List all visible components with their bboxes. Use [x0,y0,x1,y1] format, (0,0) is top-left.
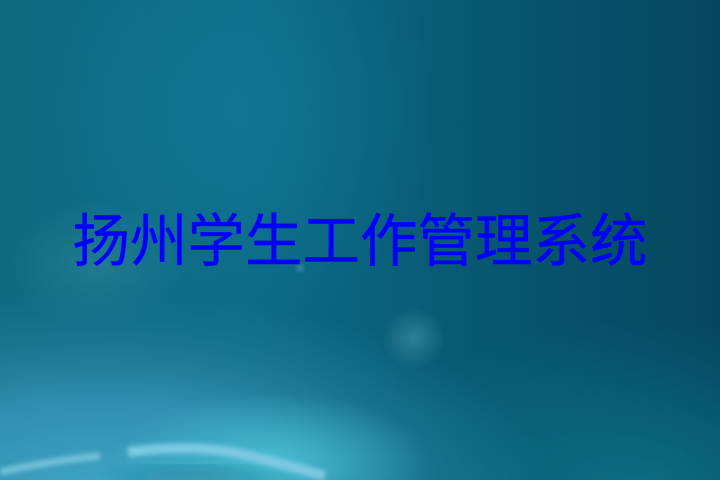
light arc right [128,448,325,476]
glow spot large [382,308,446,368]
glow spot small [294,262,306,274]
dark arc under the light band [100,471,290,478]
title: 扬州学生工作管理系统 [72,210,648,274]
light arc left [0,456,100,472]
